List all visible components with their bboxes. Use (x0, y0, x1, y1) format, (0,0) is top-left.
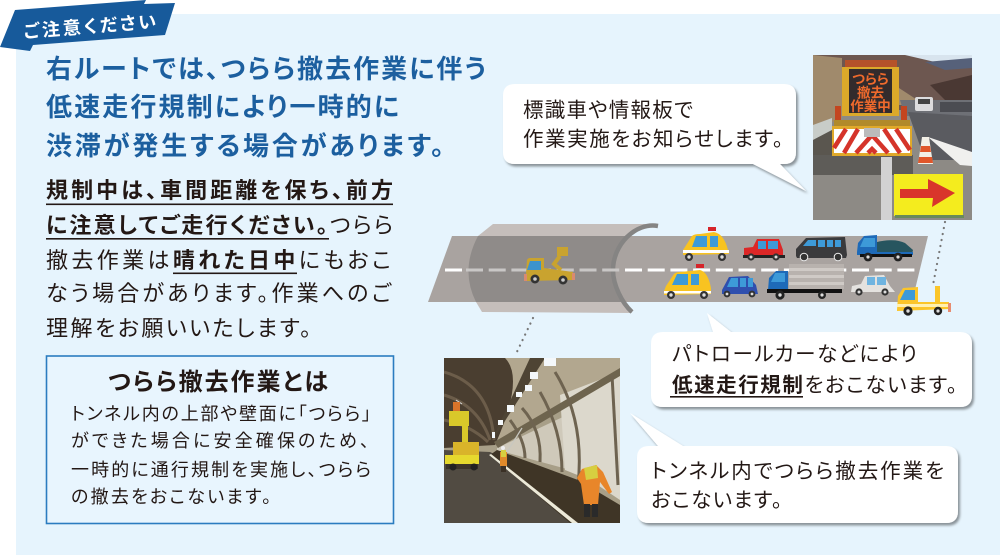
info box: つらら撤去作業とは: の撤去をおこないます。 (71, 487, 271, 507)
dotted leader: tunnel to photo (515, 318, 533, 356)
worker with pole (500, 428, 522, 472)
worker in orange (577, 465, 612, 517)
caution tag (0, 0, 175, 51)
info box: つらら撤去作業とは (46, 356, 394, 524)
callout: sign vehicle (503, 84, 806, 191)
callout: patrol car: 低速走行規制をおこないます。 (672, 374, 957, 397)
blue car (722, 276, 758, 297)
sign board: 撤去 (857, 84, 884, 100)
sign board: つらら (852, 72, 889, 87)
title (46, 54, 486, 161)
road with tunnel (428, 224, 928, 313)
callout: sign vehicle: 作業実施をお知らせします。 (523, 128, 783, 151)
tile wall (497, 418, 565, 468)
work truck in tunnel (524, 247, 575, 284)
body text: 規制中は、車間距離を保ち、前方 (46, 178, 393, 203)
white car (851, 275, 895, 296)
dotted leader: truck to sign photo (933, 222, 945, 285)
title: 低速走行規制により一時的に (46, 92, 399, 122)
body text: 撤去作業は晴れた日中にもおこ (46, 248, 391, 273)
callout: sign vehicle: 標識車や情報板で (523, 99, 693, 122)
traffic cone (918, 137, 933, 164)
photo: tunnel work (444, 358, 620, 523)
callout: tunnel work: おこないます。 (651, 489, 782, 512)
callout: patrol car (651, 313, 972, 407)
body text (46, 178, 393, 341)
body text: 理解をお願いいたします。 (46, 316, 311, 341)
road surface (444, 450, 570, 523)
aerial work truck (445, 400, 479, 470)
body text: なう場合があります。作業へのご (46, 281, 392, 306)
striped bumper (832, 126, 912, 156)
title: 渋滞が発生する場合があります。 (46, 131, 444, 161)
underlines (46, 204, 393, 274)
info box: つらら撤去作業とは: トンネル内の上部や壁面に「つらら」 (71, 404, 371, 424)
box truck (767, 264, 844, 300)
photo: sign vehicle (813, 55, 972, 220)
sign board: 作業中 (850, 98, 891, 114)
info box: つらら撤去作業とは: つらら撤去作業とは (108, 369, 328, 396)
arrow board (894, 174, 964, 218)
caution tag: ご注意ください (23, 11, 157, 42)
callout: patrol car: パトロールカーなどにより (672, 343, 917, 366)
body text: に注意してご走行ください。つらら (46, 213, 393, 238)
ceiling (498, 358, 620, 440)
callout: tunnel work (630, 413, 958, 523)
red car (743, 239, 785, 261)
info box: つらら撤去作業とは: ができた場合に安全確保のため、 (71, 431, 369, 451)
yellow lead truck (897, 286, 951, 316)
black van (796, 237, 847, 261)
title: 右ルートでは、つらら撤去作業に伴う (46, 54, 486, 84)
patrol car top (683, 227, 729, 261)
patrol car bottom (664, 264, 711, 299)
callout: tunnel work: トンネル内でつらら撤去作業を (651, 460, 944, 483)
info box: つらら撤去作業とは: 一時的に通行規制を実施し、つらら (71, 460, 371, 480)
blue flatbed truck (857, 235, 913, 261)
sign board (842, 60, 899, 116)
